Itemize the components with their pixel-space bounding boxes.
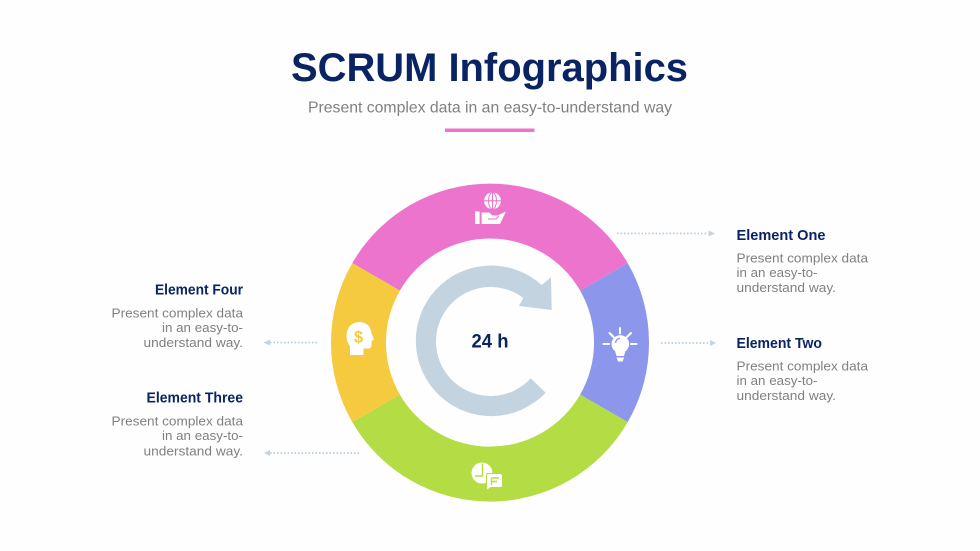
text block: element two: in an easy-to-: [736, 373, 818, 388]
segment: element one (pink): [352, 184, 628, 291]
arrow: to element one: [617, 230, 715, 236]
icon: globe in hand: [475, 192, 506, 224]
text block: element two: understand way.: [736, 388, 836, 403]
text block: element two: Present complex data: [736, 358, 869, 374]
arrow: to element four: [264, 340, 318, 346]
text block: element one: [736, 227, 869, 295]
subtitle: Present complex data in an easy-to-understand way: [308, 100, 672, 116]
text block: element four: Present complex data: [112, 306, 244, 320]
circular arrow: [416, 266, 552, 416]
center label: 24 h: 24 h: [472, 332, 508, 352]
icon: light bulb: [604, 328, 636, 362]
arrow: to element two: [661, 340, 716, 346]
text block: element one: understand way.: [736, 280, 836, 295]
text block: element two: Element Two: [736, 335, 822, 352]
text block: element one: in an easy-to-: [736, 265, 818, 280]
text block: element three: Element Three: [146, 390, 243, 406]
icon: head with dollar sign: [346, 322, 374, 355]
text block: element three: in an easy-to-: [162, 428, 243, 443]
text block: element two: [736, 335, 869, 403]
text block: element three: Present complex data: [112, 414, 244, 428]
text block: element four: understand way.: [144, 335, 243, 350]
title underline: [445, 128, 534, 132]
icon: head with dollar sign: $: [354, 328, 363, 346]
icon: clock and chat bubble: [472, 462, 502, 490]
arrow: to element three: [264, 450, 360, 456]
text block: element three: understand way.: [144, 444, 243, 458]
text block: element four: in an easy-to-: [162, 320, 243, 335]
text block: element four: Element Four: [155, 282, 243, 298]
text block: element three: [112, 390, 244, 458]
segment: element three (green): [352, 395, 628, 502]
title: SCRUM Infographics: [291, 46, 688, 90]
text block: element four: [112, 282, 244, 350]
segment: element four (yellow): [331, 263, 400, 422]
segment: element two (blue): [580, 263, 649, 422]
text block: element one: Element One: [736, 227, 826, 244]
donut cycle chart: [331, 184, 649, 502]
text block: element one: Present complex data: [736, 250, 869, 266]
